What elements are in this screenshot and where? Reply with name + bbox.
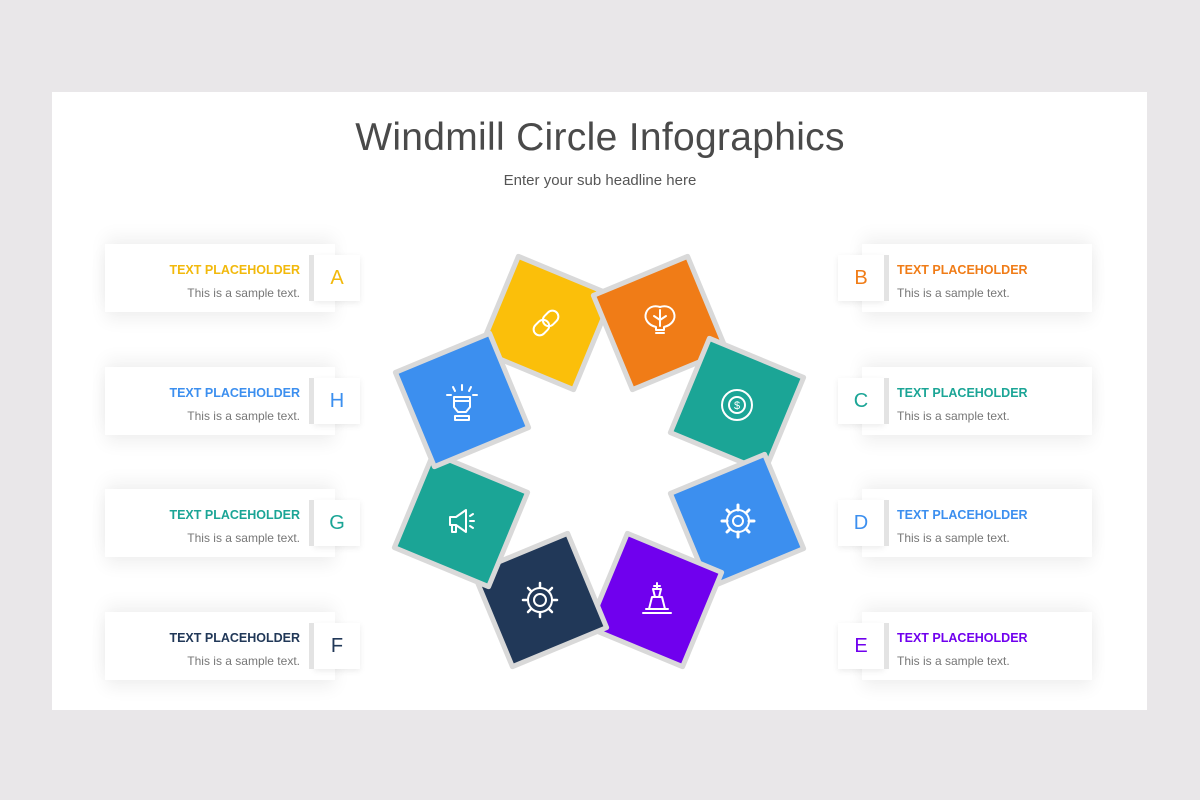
card A	[105, 244, 335, 312]
letter G: G	[329, 512, 345, 534]
card H: TEXT PLACEHOLDER	[169, 386, 300, 400]
subtitle: Enter your sub headline here	[504, 172, 696, 189]
card C: TEXT PLACEHOLDER	[897, 386, 1028, 400]
card G: TEXT PLACEHOLDER	[169, 508, 300, 522]
card D: TEXT PLACEHOLDER	[897, 508, 1028, 522]
card E: TEXT PLACEHOLDER	[897, 631, 1028, 645]
letter F	[314, 623, 360, 669]
letter F: F	[331, 635, 343, 657]
blade: orange brain	[593, 256, 727, 390]
letter C: C	[854, 390, 868, 412]
card E: This is a sample text.	[897, 654, 1010, 668]
card E	[862, 612, 1092, 680]
card D: This is a sample text.	[897, 531, 1010, 545]
card H	[105, 367, 335, 435]
card F: This is a sample text.	[187, 654, 300, 668]
card H: This is a sample text.	[187, 409, 300, 423]
letter A: A	[330, 267, 344, 289]
title: Windmill Circle Infographics	[355, 116, 845, 159]
card B: TEXT PLACEHOLDER	[897, 263, 1028, 277]
letter B: B	[854, 267, 868, 289]
letter C	[838, 378, 884, 424]
card B: This is a sample text.	[897, 286, 1010, 300]
card F	[105, 612, 335, 680]
card C	[862, 367, 1092, 435]
letter E	[838, 623, 884, 669]
letter G	[314, 500, 360, 546]
background panel	[52, 92, 1147, 710]
card F: TEXT PLACEHOLDER	[169, 631, 300, 645]
card G: This is a sample text.	[187, 531, 300, 545]
card A: TEXT PLACEHOLDER	[169, 263, 300, 277]
card A: This is a sample text.	[187, 286, 300, 300]
letter D	[838, 500, 884, 546]
letter D: D	[854, 512, 868, 534]
blade: blue right gear	[670, 454, 804, 588]
card B	[862, 244, 1092, 312]
blade: teal right dollar: $	[734, 400, 740, 412]
letter B	[838, 255, 884, 301]
card D	[862, 489, 1092, 557]
blade: blue left fist	[395, 333, 529, 467]
letter A	[314, 255, 360, 301]
letter H	[314, 378, 360, 424]
letter E: E	[854, 635, 868, 657]
card G	[105, 489, 335, 557]
blade: navy wrench gear	[473, 533, 607, 667]
blade: purple chess	[588, 533, 722, 667]
blade: teal right dollar	[670, 338, 804, 472]
blade: yellow link	[479, 256, 613, 390]
letter H: H	[330, 390, 344, 412]
card C: This is a sample text.	[897, 409, 1010, 423]
blade: teal left megaphone	[394, 453, 528, 587]
